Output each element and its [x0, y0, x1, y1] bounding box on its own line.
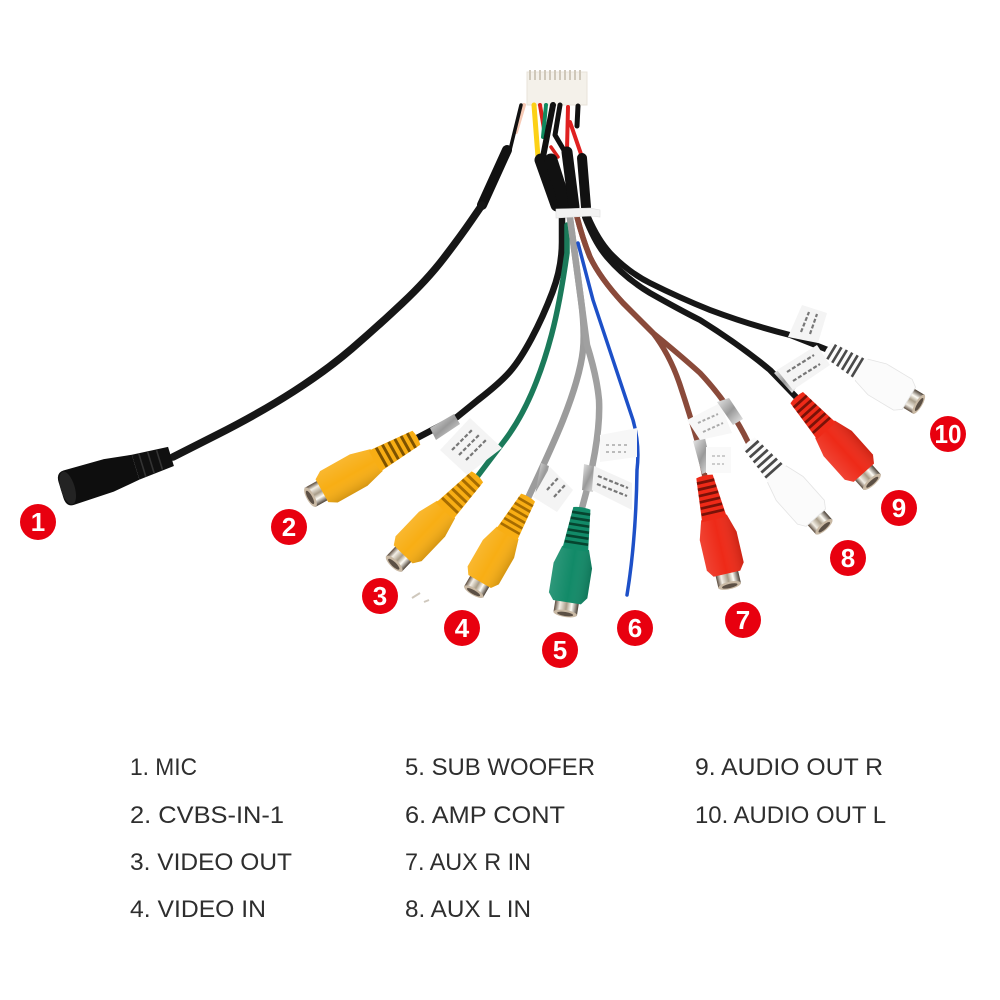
- connector 1: black mic jack: [56, 439, 176, 507]
- tag: connector 9: [774, 345, 830, 393]
- cable 2: black: [417, 218, 562, 438]
- tag: connector 10: [788, 305, 827, 343]
- badge 3: 3: [373, 581, 387, 611]
- fine wires above sleeves: [510, 105, 582, 157]
- cable 10: black: [588, 217, 828, 350]
- legend column 2: 6. AMP CONT: [405, 802, 565, 829]
- tag: connector 5 upper: [600, 428, 637, 462]
- legend: [130, 754, 886, 923]
- cable 6: blue: [578, 243, 638, 595]
- badge 10: [930, 416, 966, 452]
- cable tie: [556, 208, 600, 218]
- cable tags: [430, 305, 830, 512]
- tag: connector 4: [533, 463, 573, 512]
- wiring harness: [173, 70, 828, 595]
- legend column 1: 3. VIDEO OUT: [130, 849, 292, 876]
- connector 2: yellow RCA: [298, 421, 426, 515]
- connector 10: white RCA: [817, 333, 931, 421]
- connector 8: white RCA: [735, 430, 840, 542]
- tag: connector 8: [687, 398, 743, 440]
- cable 4: grey: [528, 218, 584, 498]
- badge 9: 9: [892, 493, 906, 523]
- badge 8: 8: [841, 543, 855, 573]
- tag: connector 2: [430, 414, 502, 475]
- legend column 1: 4. VIDEO IN: [130, 896, 266, 923]
- badge 7: 7: [736, 605, 750, 635]
- cable 8: brown: [577, 217, 748, 442]
- badge 3: [362, 578, 398, 614]
- legend column 1: 1. MIC: [130, 754, 197, 781]
- badge 2: [271, 509, 307, 545]
- badge 1: 1: [31, 507, 45, 537]
- tag: connector 7: [693, 438, 731, 474]
- cable 1: mic: [173, 205, 482, 457]
- cable 9: black: [585, 217, 797, 398]
- black shrink sleeves: [482, 150, 586, 207]
- connector 4: yellow RCA: [456, 488, 544, 604]
- connector 9: red RCA: [782, 384, 889, 497]
- badge 6: 6: [628, 613, 642, 643]
- cable 5: grey: [570, 218, 599, 508]
- badge 9: [881, 490, 917, 526]
- connector 5: green RCA: [545, 504, 601, 620]
- legend column 2: 7. AUX R IN: [405, 849, 531, 876]
- legend column 1: 2. CVBS-IN-1: [130, 802, 284, 829]
- badge 8: [830, 540, 866, 576]
- legend column 3: 10. AUDIO OUT L: [695, 802, 886, 829]
- badge 6: [617, 610, 653, 646]
- debris specks: [412, 593, 429, 602]
- legend column 3: [695, 754, 886, 829]
- badge 4: [444, 610, 480, 646]
- legend column 1: [130, 754, 292, 923]
- connector 7: red RCA: [686, 471, 749, 593]
- badge 2: 2: [282, 512, 296, 542]
- badge 5: [542, 632, 578, 668]
- badge 10: 10: [934, 419, 962, 449]
- number badges: [20, 416, 966, 668]
- header plug: [527, 70, 587, 105]
- badge 5: 5: [553, 635, 567, 665]
- cable 3: green: [477, 225, 567, 477]
- legend column 3: 9. AUDIO OUT R: [695, 754, 883, 781]
- legend column 2: 8. AUX L IN: [405, 896, 531, 923]
- tag: connector 5 lower: [582, 464, 632, 510]
- cable 7: brown: [577, 217, 705, 477]
- badge 7: [725, 602, 761, 638]
- connector 3: yellow RCA: [378, 464, 491, 579]
- badge 1: [20, 504, 56, 540]
- legend column 2: 5. SUB WOOFER: [405, 754, 595, 781]
- badge 4: 4: [455, 613, 470, 643]
- legend column 2: [405, 754, 595, 923]
